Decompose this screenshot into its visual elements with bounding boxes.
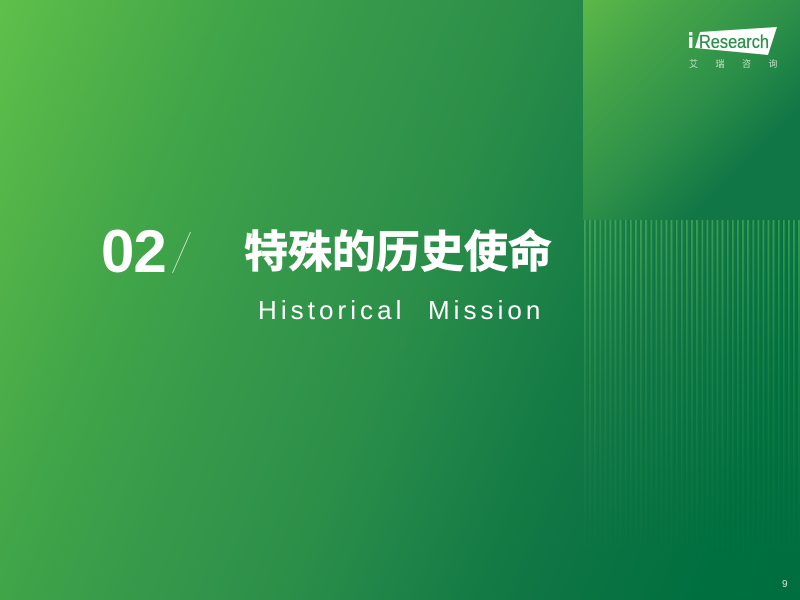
vertical stripe pattern bbox=[584, 220, 800, 471]
logo mark bbox=[689, 27, 777, 55]
page number: 9 bbox=[782, 579, 788, 590]
title: 特殊的历史使命 bbox=[244, 228, 552, 277]
logo caption: 艾瑞咨询 bbox=[689, 59, 795, 69]
logo mark: Research bbox=[699, 32, 769, 52]
section number: 02 bbox=[101, 218, 166, 285]
logo: iResearch bbox=[689, 27, 795, 69]
panel: top right gradient bbox=[583, 0, 800, 220]
slash divider bbox=[172, 232, 191, 274]
subtitle: Historical Mission bbox=[258, 295, 544, 325]
